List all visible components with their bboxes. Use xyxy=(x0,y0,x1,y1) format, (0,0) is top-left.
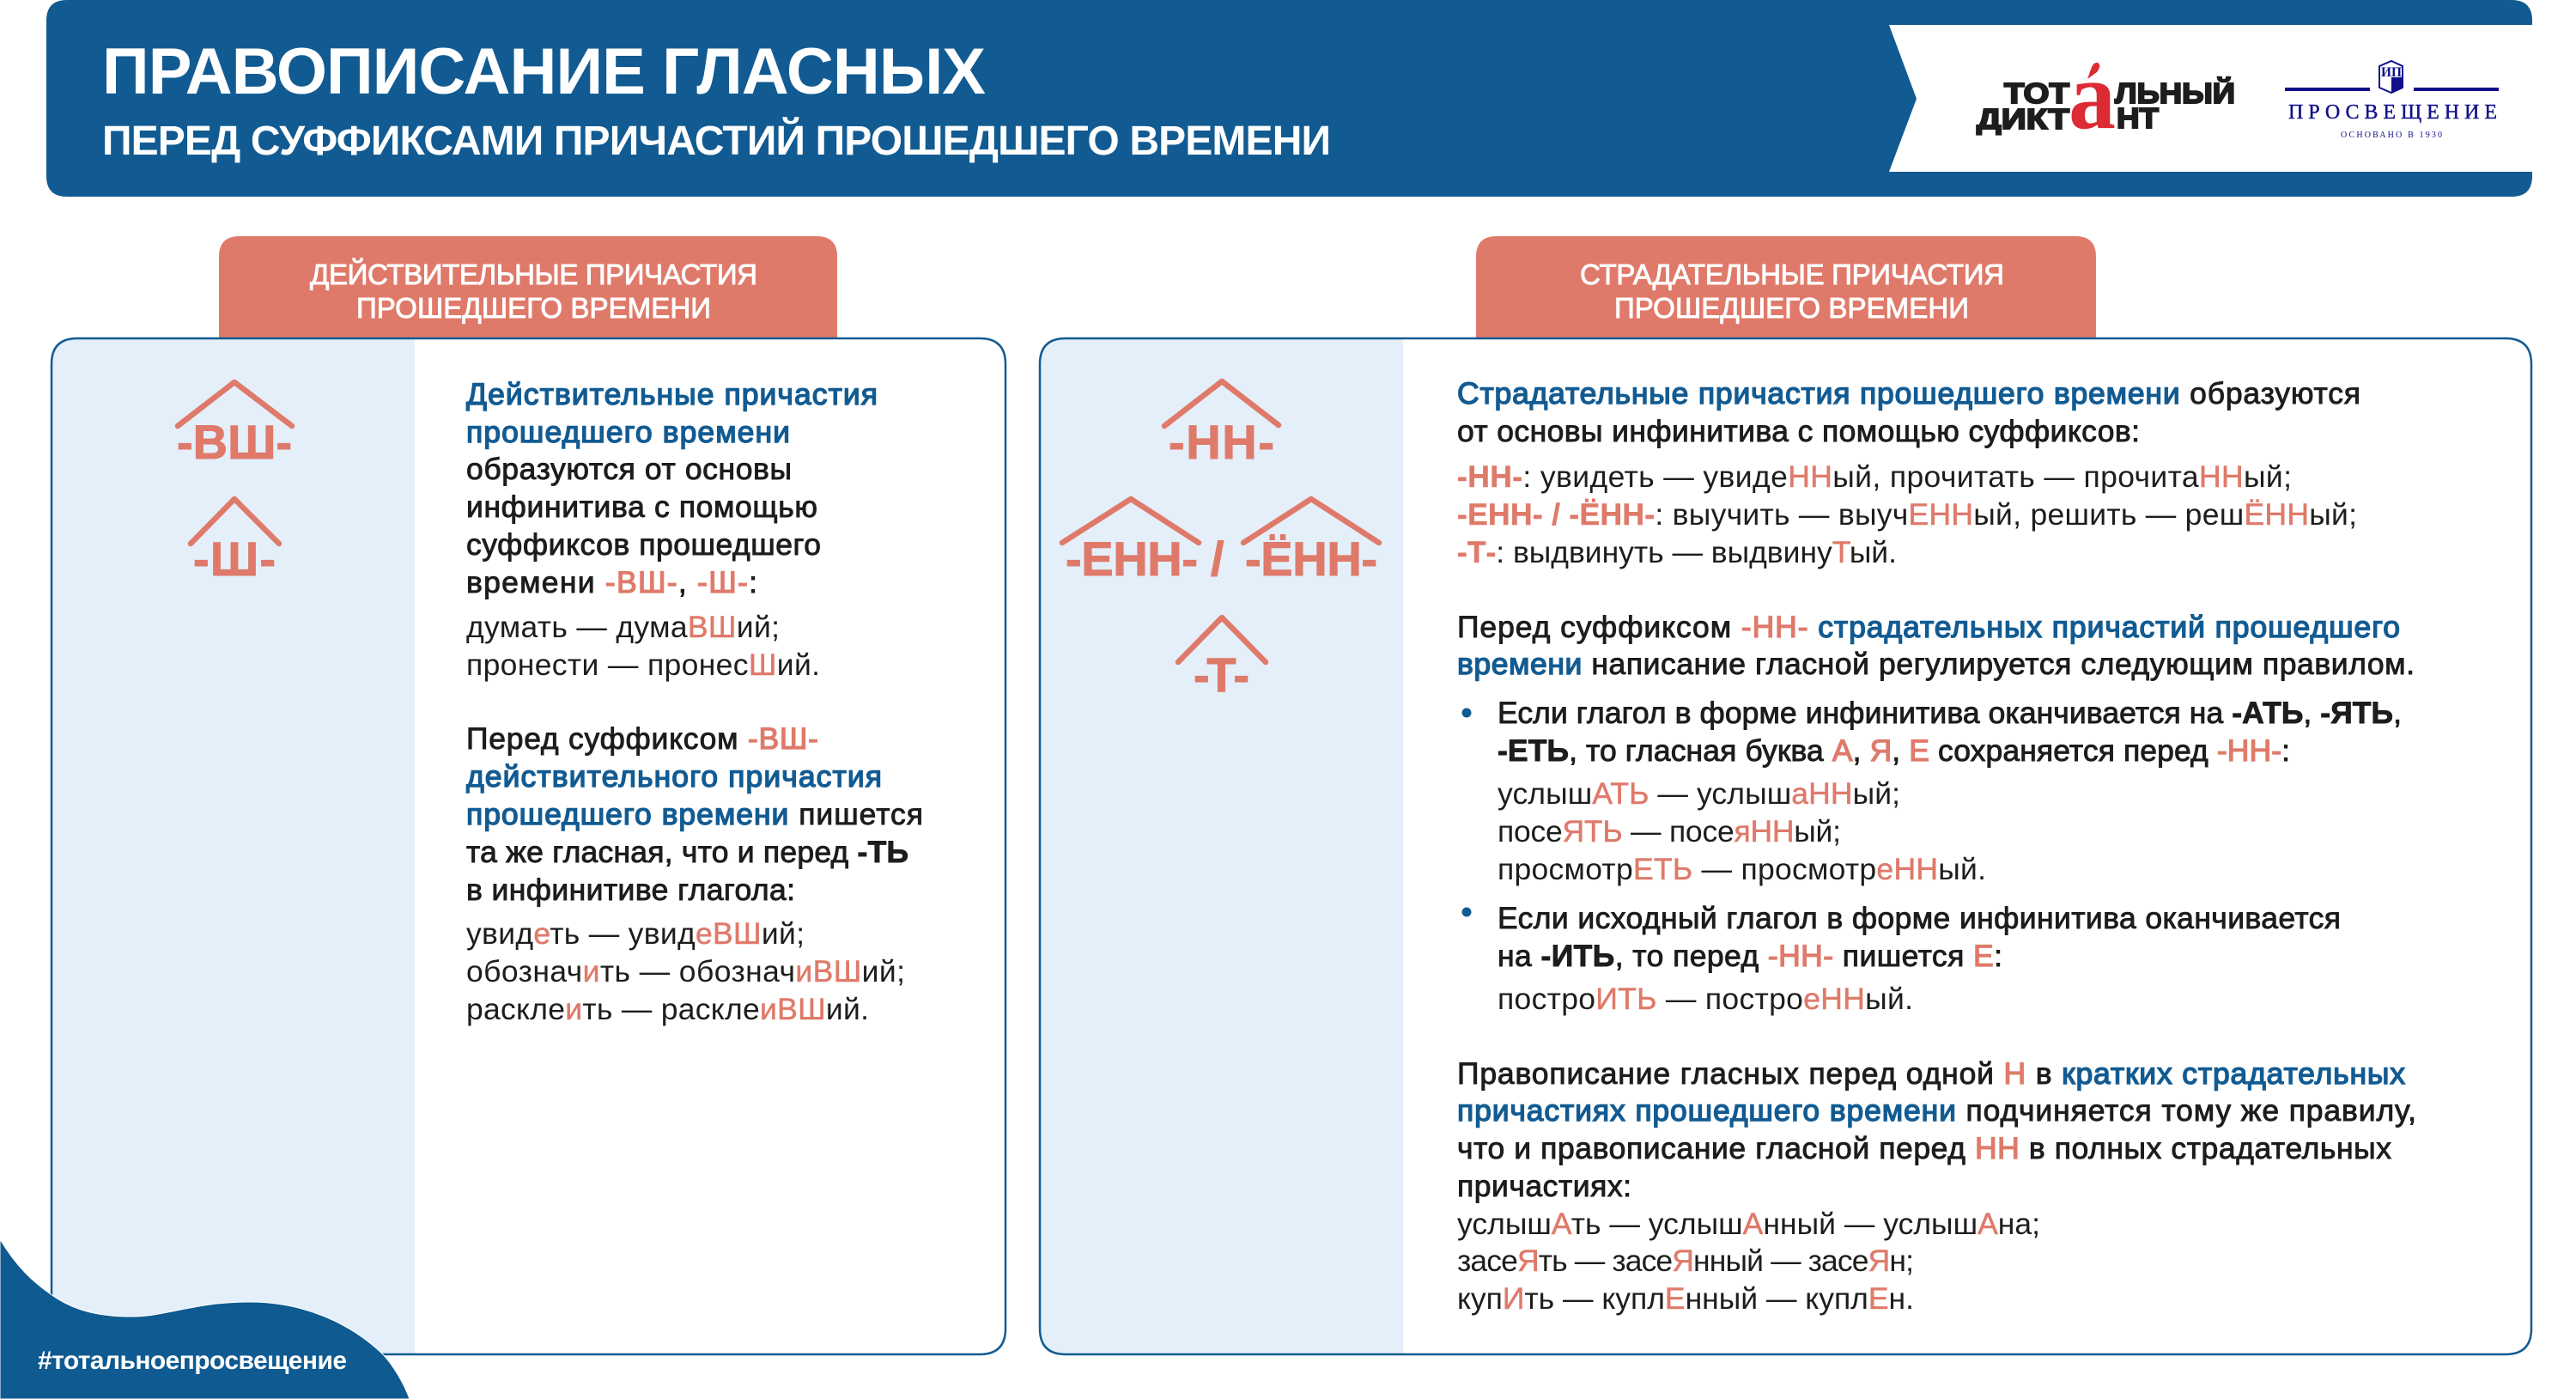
text: rule for active participles: обозначить — обозначиВШий; xyxy=(466,954,905,988)
logo: Тотальный диктант: ЛЬНЫЙ xyxy=(2115,76,2235,109)
text: rule for active participles: действительного причастия xyxy=(466,759,882,794)
text: short passive participles: услышАть — услышАнный — услышАна; xyxy=(1457,1207,2040,1241)
text: rule intro: Перед суффиксом -НН- страдательных причастий прошедшего xyxy=(1457,610,2400,644)
text: definition of active participles xyxy=(466,377,878,682)
icon: suffix ВШ house xyxy=(177,382,292,469)
logo: Тотальный диктант: ТОТ xyxy=(2004,77,2069,109)
text: rule for active participles: прошедшего времени пишется xyxy=(466,797,923,831)
icon: suffix ЕНН / ЁНН houses xyxy=(1062,499,1379,586)
title: ПРАВОПИСАНИЕ ГЛАСНЫХ xyxy=(102,35,986,108)
icon: suffix НН house xyxy=(1164,381,1279,469)
header banner xyxy=(46,0,2532,197)
text: definition of passive participles: -НН-: увидеть — увидеННый, прочитать — прочитаННый; xyxy=(1457,459,2292,494)
icon: suffix ЕНН / ЁНН houses: -ЕНН- xyxy=(1066,532,1198,586)
text: definition of passive participles: -Т-: выдвинуть — выдвинуТый. xyxy=(1457,535,1897,569)
text: definition of active participles: суффиксов прошедшего xyxy=(466,527,821,562)
text: definition of passive participles: Страдательные причастия прошедшего времени образуются xyxy=(1457,376,2360,411)
text: rule for active participles: в инфинитиве глагола: xyxy=(466,873,795,907)
list item: verbs in -ать, -ять, -еть: посеЯТЬ — посеяННый; xyxy=(1498,814,1841,849)
text: definition of passive participles: -ЕНН- / -ЁНН-: выучить — выучЕННый, решить — решЁННый; xyxy=(1457,497,2357,532)
tab: right: СТРАДАТЕЛЬНЫЕ ПРИЧАСТИЯ xyxy=(1580,259,2004,290)
text: definition of active participles: прошедшего времени xyxy=(466,415,790,449)
list item: verbs in -ать, -ять, -еть: Если глагол в форме инфинитива оканчивается на -АТЬ, -ЯТЬ, xyxy=(1498,696,2402,730)
text: definition of active participles: образуются от основы xyxy=(466,452,792,486)
logo: Просвещение: ПРОСВЕЩЕНИЕ xyxy=(2288,101,2497,124)
text: rule intro: времени написание гласной регулируется следующим правилом. xyxy=(1457,647,2415,681)
text: rule for active participles: расклеить — расклеиВШий. xyxy=(466,992,869,1026)
text: rule for active participles: Перед суффиксом -ВШ- xyxy=(466,721,818,756)
icon: suffix НН house: -НН- xyxy=(1169,415,1274,469)
hashtag wave xyxy=(0,1239,410,1399)
tab: right xyxy=(1476,236,2096,338)
text: short passive participles: купИть — куплЕнный — куплЕн. xyxy=(1457,1281,1914,1316)
panel: right xyxy=(1040,338,2531,1354)
icon: suffix ВШ house: -ВШ- xyxy=(177,415,292,469)
logo: Просвещение: ИП xyxy=(2381,65,2403,80)
text: definition of active participles: Действительные причастия xyxy=(466,377,878,411)
icon: suffix Т house xyxy=(1178,617,1266,702)
title: ПЕРЕД СУФФИКСАМИ ПРИЧАСТИЙ ПРОШЕДШЕГО ВРЕМЕНИ xyxy=(102,117,1331,164)
icon: suffix ЕНН / ЁНН houses: / xyxy=(1211,532,1224,586)
logo: Тотальный диктант xyxy=(1977,43,2235,149)
list item: verbs in -ить: построИТЬ — построеННый. xyxy=(1498,982,1913,1016)
text: definition of active participles: инфинитива с помощью xyxy=(466,490,817,524)
hashtag wave: #тотальноепросвещение xyxy=(38,1347,347,1375)
logo: Просвещение xyxy=(2285,61,2499,140)
list item: verbs in -ать, -ять, -еть: -ЕТЬ, то гласная буква А, Я, Е сохраняется перед -НН-: xyxy=(1498,733,2290,768)
tab: right: ПРОШЕДШЕГО ВРЕМЕНИ xyxy=(1614,292,1969,324)
tab: left: ДЕЙСТВИТЕЛЬНЫЕ ПРИЧАСТИЯ xyxy=(310,259,757,290)
text: definition of active participles: пронести — пронесШий. xyxy=(466,648,820,682)
text: rule intro xyxy=(1457,610,2415,681)
text: definition of passive participles xyxy=(1457,376,2360,569)
text: rule for active participles: увидеть — увидеВШий; xyxy=(466,916,805,951)
tab: left xyxy=(219,236,837,338)
icon: suffix ЕНН / ЁНН houses: -ЁНН- xyxy=(1245,532,1377,586)
text: definition of active participles: времени -ВШ-, -Ш-: xyxy=(466,565,757,599)
list item: verbs in -ить: Если исходный глагол в форме инфинитива оканчивается xyxy=(1498,901,2341,935)
text: short passive participles: причастиях: xyxy=(1457,1169,1631,1203)
list item: verbs in -ить: на -ИТЬ, то перед -НН- пишется Е: xyxy=(1498,939,2002,973)
panel: left xyxy=(52,338,1005,1354)
icon: suffix Т house: -Т- xyxy=(1194,648,1249,702)
logo: Тотальный диктант: ДИКТ xyxy=(1977,103,2069,135)
logo: Тотальный диктант: а xyxy=(2069,43,2116,149)
text: short passive participles: что и правописание гласной перед НН в полных страдательных xyxy=(1457,1131,2391,1165)
icon: suffix Ш house xyxy=(191,499,279,586)
logo: Просвещение: ОСНОВАНО В 1930 xyxy=(2341,131,2442,140)
list item: verbs in -ить xyxy=(1461,901,2341,1016)
text: short passive participles: причастиях прошедшего времени подчиняется тому же правилу, xyxy=(1457,1093,2416,1128)
icon: suffix Ш house: -Ш- xyxy=(193,532,276,586)
text: definition of passive participles: от основы инфинитива с помощью суффиксов: xyxy=(1457,414,2140,448)
text: rule for active participles: та же гласная, что и перед -ТЬ xyxy=(466,835,908,869)
list item: verbs in -ать, -ять, -еть xyxy=(1461,696,2402,886)
list item: verbs in -ать, -ять, -еть: услышАТЬ — услышаННый; xyxy=(1498,776,1900,811)
tab: left: ПРОШЕДШЕГО ВРЕМЕНИ xyxy=(356,292,711,324)
text: short passive participles: засеЯть — засеЯнный — засеЯн; xyxy=(1457,1244,1914,1278)
title xyxy=(102,35,1331,164)
list item: verbs in -ать, -ять, -еть: просмотрЕТЬ — просмотреННый. xyxy=(1498,852,1986,886)
text: rule for active participles xyxy=(466,721,923,1026)
text: short passive participles: Правописание гласных перед одной Н в кратких страдательных xyxy=(1457,1056,2405,1091)
text: short passive participles xyxy=(1457,1056,2416,1316)
logo: Тотальный диктант: НТ xyxy=(2117,102,2159,134)
text: definition of active participles: думать — думаВШий; xyxy=(466,610,780,644)
